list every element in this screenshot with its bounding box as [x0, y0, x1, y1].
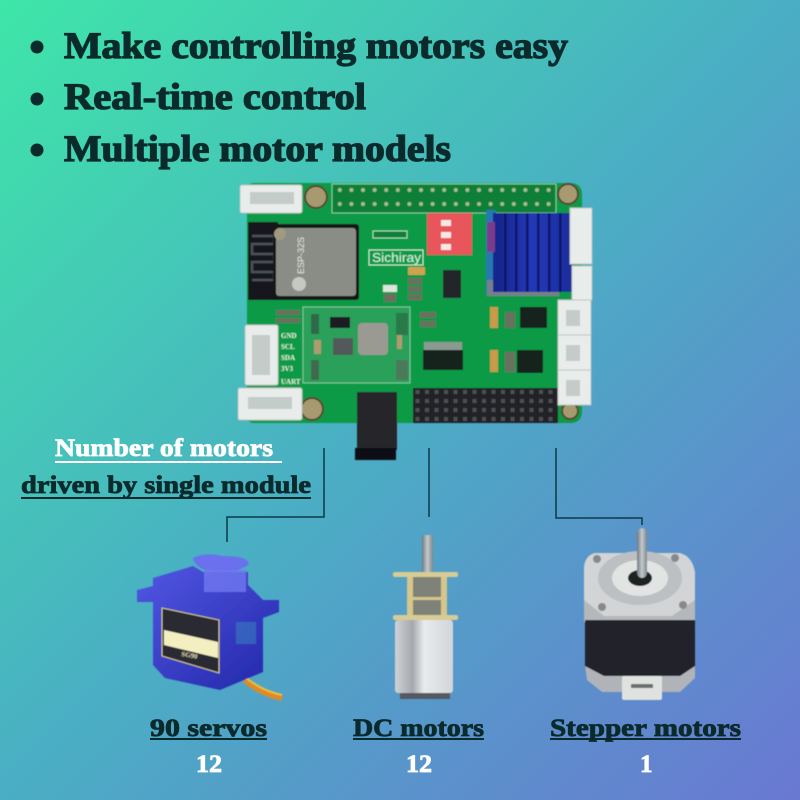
silk labels: 3V3	[281, 365, 294, 373]
led	[383, 285, 397, 292]
silk labels: SDA	[281, 354, 295, 362]
text: make controlling motors easy: Make controlling motors easy	[64, 25, 568, 66]
label: 90 servos: 90 servos	[150, 715, 267, 742]
connector detail	[248, 192, 580, 409]
servo label: SG90	[181, 650, 199, 661]
icon: stepper motor	[584, 528, 695, 700]
pin header block	[413, 388, 558, 423]
text: multiple motor models: Multiple motor models	[64, 128, 451, 169]
driver chips	[423, 307, 547, 373]
line to dc motor	[428, 448, 430, 517]
pcb	[247, 183, 582, 423]
value: 1 stepper motor: 1	[640, 751, 652, 778]
bullet: real-time	[30, 92, 44, 106]
line to stepper	[556, 448, 642, 525]
dip switch	[427, 213, 472, 255]
gpio header	[332, 184, 556, 213]
brand label: Sichiray	[372, 250, 422, 265]
bullet: multiple models	[30, 144, 44, 156]
chip legs	[424, 342, 462, 350]
small header	[373, 231, 407, 238]
heading: number of motors: Number of motors	[55, 435, 273, 462]
line to servo	[227, 448, 324, 542]
small smd parts	[276, 278, 515, 372]
bullet: controlling motors	[30, 40, 44, 54]
label: dc motors: DC motors	[353, 715, 484, 742]
screws	[301, 184, 578, 420]
silk labels	[281, 332, 301, 386]
silk labels: UART	[281, 378, 301, 386]
esp32 module	[248, 222, 359, 300]
heading: driven by single module: driven by single module	[21, 472, 311, 499]
tantalum capacitors	[490, 307, 498, 372]
capacitor	[408, 267, 425, 275]
esp32 label: ESP-32S	[296, 237, 306, 274]
connector lines	[227, 448, 642, 542]
text: real-time control: Real-time control	[64, 76, 366, 117]
power jack	[355, 392, 397, 460]
motor driver board	[238, 183, 592, 460]
value: 12 dc motors: 12	[406, 751, 432, 778]
label: stepper motors: Stepper motors	[550, 715, 741, 742]
icon: servo	[137, 554, 282, 698]
blue heatsink	[486, 210, 572, 296]
icon: dc motor	[393, 535, 458, 699]
regulator	[443, 270, 461, 298]
value: 12 servos: 12	[196, 751, 222, 778]
buck converter	[303, 307, 410, 383]
white connectors	[238, 185, 592, 420]
silk labels: SCL	[281, 343, 295, 351]
silk labels: GND	[281, 332, 297, 340]
feature list	[30, 25, 568, 169]
